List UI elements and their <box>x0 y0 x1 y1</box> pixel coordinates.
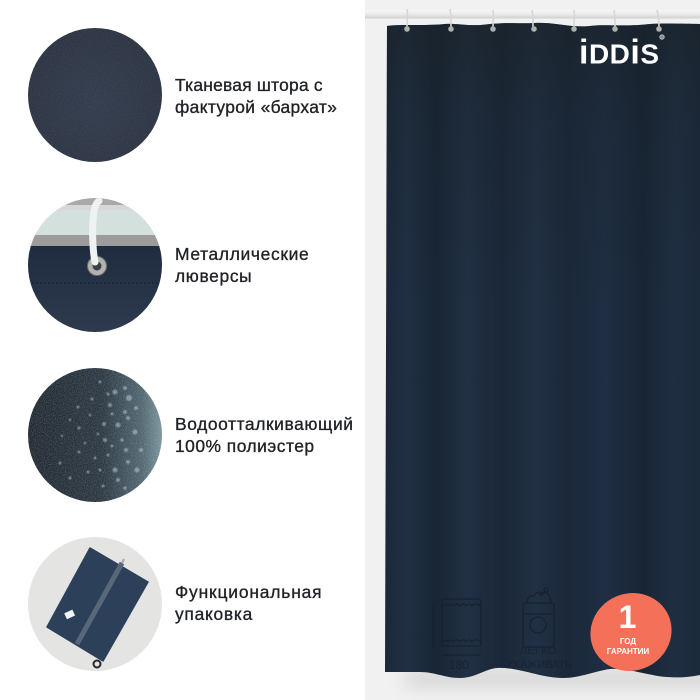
warranty badge: ГАРАНТИИ <box>607 647 649 656</box>
circle photo: metal grommet <box>28 198 162 333</box>
curtain rod <box>365 10 700 18</box>
text: functional packaging: упаковка <box>175 604 253 624</box>
text: functional packaging <box>174 582 322 624</box>
icon: oven temperature care <box>433 599 481 672</box>
text: water repellent <box>175 414 354 456</box>
text: metal grommets: люверсы <box>175 266 252 286</box>
warranty badge <box>578 580 684 684</box>
icon: washing machine: УХАЖИВАТЬ <box>506 659 572 671</box>
circle photo: velvet fabric texture <box>28 28 162 162</box>
text: velvet fabric: Тканевая штора с <box>175 75 323 95</box>
curtain <box>385 23 700 678</box>
warranty badge: ГОД <box>620 637 636 646</box>
right photo background <box>365 0 700 700</box>
circle photo: water droplets <box>28 368 162 502</box>
circle photo: packaging bag <box>28 537 162 671</box>
text: velvet fabric: фактурой «бархат» <box>175 97 337 117</box>
brand logo: iDDiS <box>579 34 660 72</box>
text: metal grommets: Металлические <box>175 244 309 264</box>
icon: washing machine <box>506 588 572 671</box>
icon: washing machine: ЛЕГКО <box>520 645 556 657</box>
icon: oven temperature care: 180 <box>449 658 469 672</box>
curtain rings <box>404 9 662 32</box>
text: functional packaging: Функциональная <box>175 582 322 602</box>
text: water repellent: Водоотталкивающий <box>175 414 354 434</box>
text: water repellent: 100% полиэстер <box>175 436 315 456</box>
warranty badge: 1 <box>619 599 636 635</box>
text: velvet fabric <box>175 75 337 117</box>
text: metal grommets <box>174 244 309 286</box>
